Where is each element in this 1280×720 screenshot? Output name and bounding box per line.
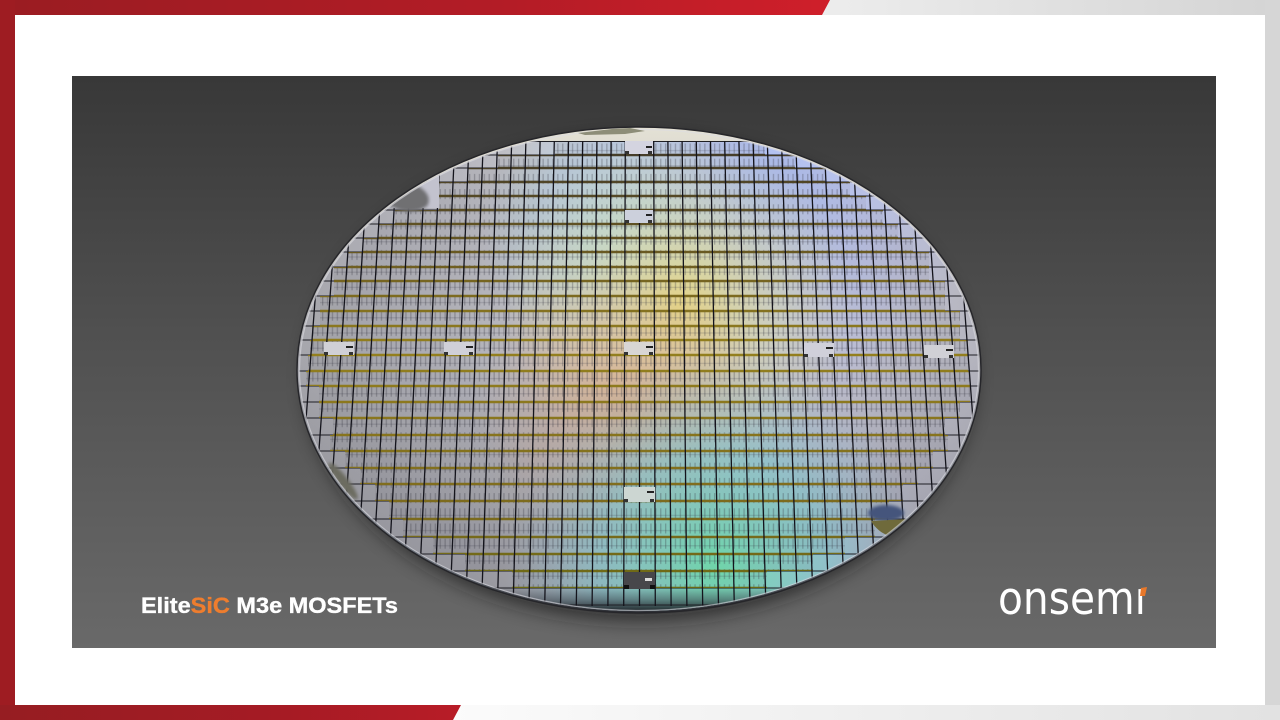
test die: bottom dark [624,572,655,589]
frame: top gray band [820,0,1280,15]
gold horizontal streets [297,155,981,588]
test die: right outer [924,345,954,358]
frame: top red band [0,0,830,15]
test die: left outer [324,342,354,355]
wafer photo [260,127,1003,622]
product label: EliteSiC M3e MOSFETs [141,593,398,618]
iridescence: orange [507,298,736,504]
lower-left smudge [327,462,359,501]
logo orange accent [1140,587,1147,596]
iridescence: teal [532,376,885,611]
lower-right olive mark [871,519,906,535]
die tone [506,142,932,586]
upper-left smudge [388,186,429,211]
frame: bottom red band [0,705,461,720]
die surface base [297,141,981,613]
vertical scribe lines [306,141,974,606]
lower surface shading [308,392,974,604]
dies with circuit texture [297,141,981,613]
iridescence: yellow [538,149,832,414]
die texture [297,141,981,613]
iridescence: blue [600,142,928,332]
test die: right inner [804,343,834,357]
upper-left blank cell [392,175,439,208]
test die: lower [624,487,655,502]
logo wordmark: onsemı [998,572,1146,625]
test die: center [624,342,654,355]
test die: upper [625,210,653,223]
iridescence: cyan [522,170,628,277]
wafer disc [297,127,981,613]
onsemi logo [998,572,1147,625]
bottom edge shading [500,588,779,611]
frame: bottom light band [450,705,1280,720]
frame: right gray band [1265,0,1280,720]
wafer drop shadow [306,136,974,622]
photo panel background [72,76,1216,648]
lower-right blue mark [868,505,904,521]
test die: top [625,141,653,154]
wafer surface [260,141,1003,613]
margin horizontal lines [297,142,981,605]
top edge flat [578,128,645,135]
frame: left red band [0,0,15,720]
wafer rim highlight [300,130,978,610]
test die: left inner [444,342,474,355]
